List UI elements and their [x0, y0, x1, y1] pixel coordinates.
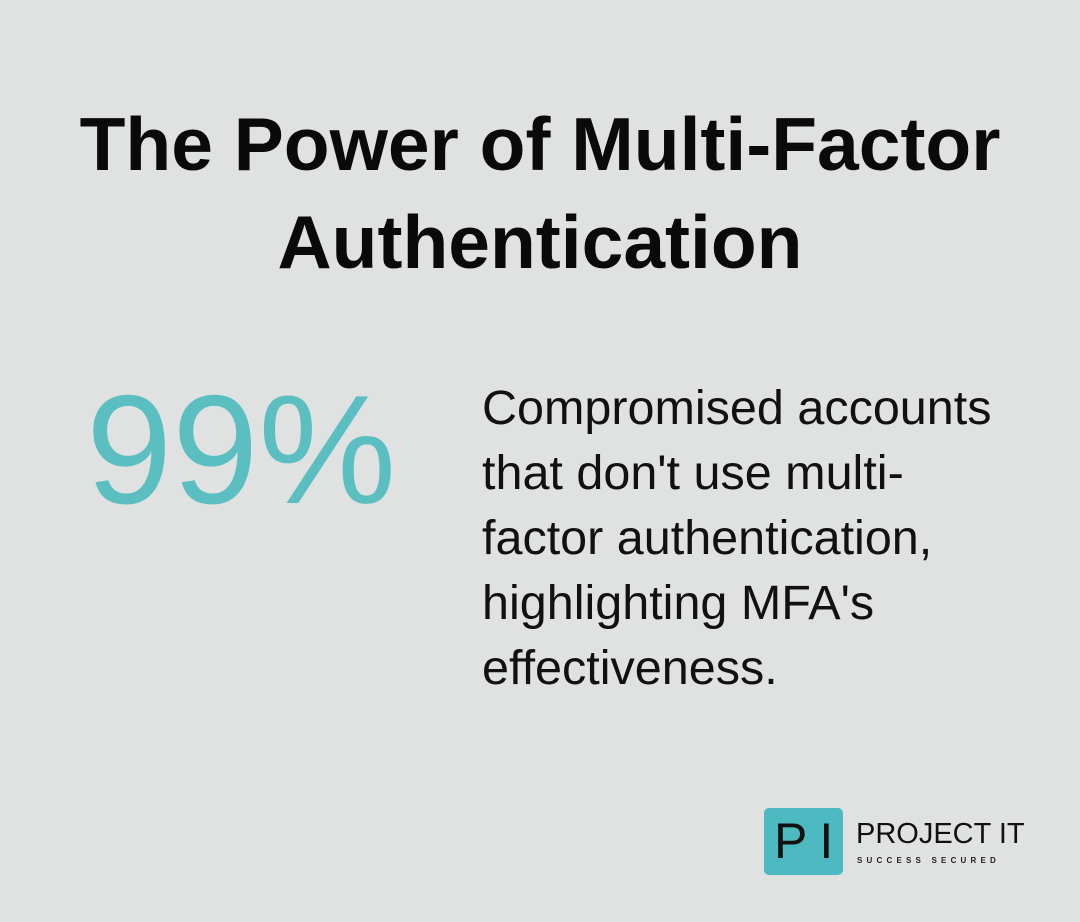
brand name: PROJECT IT — [856, 818, 1025, 850]
title: Authentication — [278, 200, 802, 284]
description text: effectiveness. — [482, 641, 778, 695]
tagline: SUCCESS SECURED — [857, 856, 1000, 865]
title — [80, 102, 1000, 284]
icon: PI box: PI — [774, 813, 845, 869]
description text: factor authentication, — [482, 511, 932, 565]
description text: highlighting MFA's — [482, 576, 874, 630]
stat: 99%: 99% — [86, 363, 396, 536]
logo: Project IT — [764, 808, 1025, 875]
description text: that don't use multi- — [482, 446, 904, 500]
title: The Power of Multi-Factor — [80, 102, 1000, 186]
description text — [482, 381, 991, 695]
description text: Compromised accounts — [482, 381, 991, 435]
